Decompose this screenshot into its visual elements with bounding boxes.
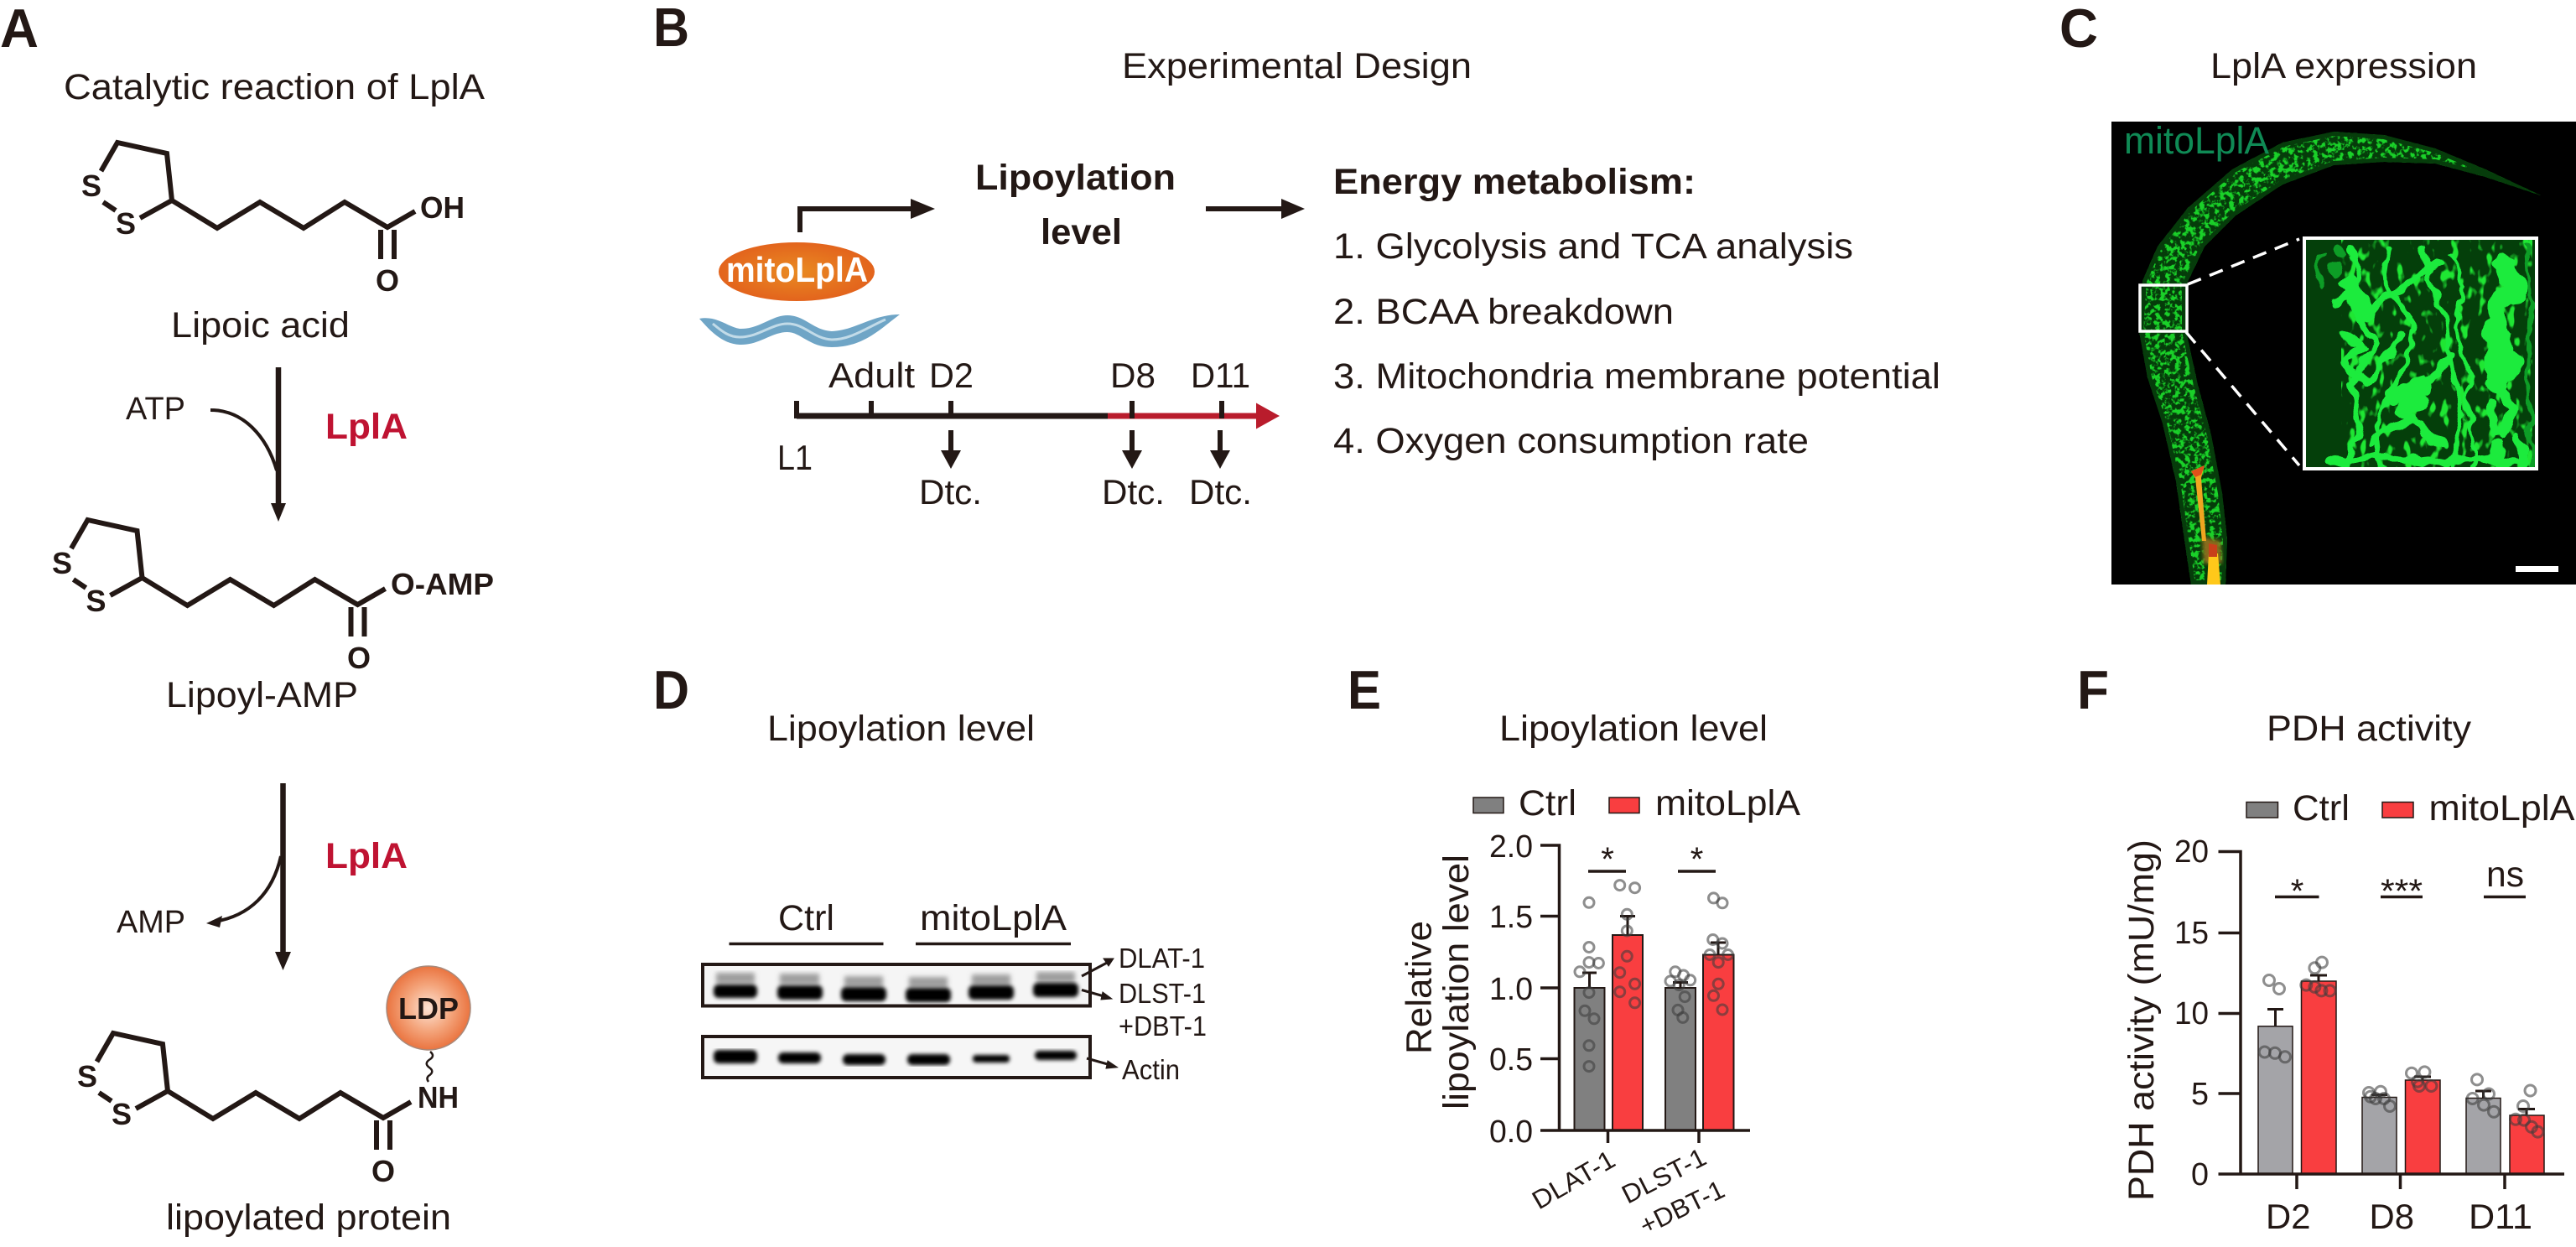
text: lipoylation level: level bbox=[1041, 212, 1122, 252]
heading: energy metabolism: Energy metabolism: bbox=[1333, 162, 1696, 202]
legend: mitoLplA bbox=[1655, 783, 1800, 824]
heading: catalytic reaction: Catalytic reaction of LplA bbox=[64, 67, 485, 107]
structure: lipoylated protein: NH bbox=[418, 1080, 459, 1115]
x-axis category labels: DLAT-1 bbox=[1527, 1145, 1620, 1215]
arrow: mitoLplA to lipoylation bbox=[800, 199, 935, 232]
band labels: DLAT-1 bbox=[1119, 943, 1205, 974]
icon: blue worm bbox=[699, 314, 900, 347]
panel letter D: D bbox=[653, 659, 689, 720]
y-axis tick labels bbox=[1489, 829, 1533, 1150]
panel letter F: F bbox=[2077, 659, 2109, 720]
legend: Ctrl bbox=[1519, 783, 1576, 824]
y-axis tick labels: 2.0 bbox=[1489, 829, 1533, 865]
oval: mitoLplA bbox=[719, 242, 875, 301]
bars bbox=[1575, 935, 1734, 1130]
arrow: lipoylation to energy metabolism bbox=[1206, 199, 1305, 219]
y-axis title: lipoylation level bbox=[1436, 855, 1477, 1109]
panel letter E: E bbox=[1348, 659, 1381, 720]
panel F: PDH activity bar chart bbox=[2077, 659, 2575, 1236]
zoom box bbox=[2140, 285, 2187, 331]
timepoint labels: D2 bbox=[929, 356, 974, 395]
label: lipoic acid: Lipoic acid bbox=[171, 305, 350, 346]
heading: PDH activity: PDH activity bbox=[2267, 709, 2472, 749]
enzyme label: LplA: LplA bbox=[325, 836, 408, 876]
legend bbox=[2246, 788, 2575, 829]
y-axis title bbox=[1399, 855, 1477, 1109]
blot: DLAT-1 and DLST-1 bands bbox=[703, 964, 1090, 1006]
list of analyses: 2. BCAA breakdown bbox=[1333, 292, 1674, 332]
group labels with brackets: Ctrl bbox=[778, 898, 834, 938]
label: lipoylated protein: lipoylated protein bbox=[166, 1198, 451, 1238]
x-axis category labels: D8 bbox=[2370, 1197, 2414, 1236]
x-axis category labels: +DBT-1 bbox=[1635, 1174, 1729, 1240]
detection labels: Dtc. bbox=[1102, 472, 1165, 512]
significance markers: * bbox=[1690, 841, 1703, 878]
oval: mitoLplA: mitoLplA bbox=[726, 250, 868, 289]
heading: lipoylation level: Lipoylation level bbox=[767, 709, 1035, 749]
timepoint labels: D8 bbox=[1110, 356, 1156, 395]
band labels: Actin bbox=[1122, 1054, 1180, 1085]
group labels with brackets bbox=[730, 898, 1071, 944]
heading: lipoylation level: Lipoylation level bbox=[1499, 709, 1768, 749]
band labels: DLST-1 bbox=[1119, 978, 1206, 1009]
axes bbox=[1540, 845, 1750, 1143]
label: AMP: AMP bbox=[117, 905, 185, 940]
label: mitoLplA: mitoLplA bbox=[2124, 119, 2269, 162]
structure: lipoylated protein: S bbox=[77, 1059, 97, 1094]
bars bbox=[2258, 981, 2544, 1174]
label: ATP: ATP bbox=[126, 392, 185, 427]
timepoint labels bbox=[777, 356, 1250, 477]
y-axis title: Relative bbox=[1399, 921, 1439, 1054]
y-axis tick labels: 5 bbox=[2191, 1077, 2209, 1112]
blot: actin bands bbox=[703, 1037, 1090, 1078]
structure: lipoic acid: S bbox=[81, 169, 101, 203]
panel D: western blot bbox=[653, 659, 1207, 1085]
significance markers: ns bbox=[2486, 855, 2524, 895]
inset: mitochondria close-up bbox=[2304, 238, 2537, 469]
structure: lipoylated protein: S bbox=[112, 1097, 132, 1131]
timepoint labels: D11 bbox=[1191, 356, 1250, 395]
fluorescence image bbox=[2111, 119, 2576, 585]
data points bbox=[2259, 957, 2543, 1137]
legend bbox=[1473, 783, 1800, 824]
y-axis tick labels: 1.5 bbox=[1489, 900, 1533, 935]
band labels: +DBT-1 bbox=[1119, 1011, 1207, 1042]
x-axis category labels: D11 bbox=[2469, 1197, 2532, 1236]
scale bar bbox=[2516, 566, 2558, 572]
structure: lipoic acid: O bbox=[376, 263, 399, 298]
protein bead: LDP bbox=[387, 966, 470, 1050]
timepoint labels: L1 bbox=[777, 438, 813, 477]
protein bead: LDP: LDP bbox=[398, 991, 459, 1026]
significance markers: *** bbox=[2381, 873, 2423, 910]
structure: lipoyl-AMP: S bbox=[52, 546, 72, 580]
heading: LplA expression: LplA expression bbox=[2210, 46, 2477, 86]
panel A: catalytic reaction of LplA bbox=[0, 0, 494, 1238]
x-axis category labels bbox=[1527, 1142, 1729, 1240]
list of analyses: 3. Mitochondria membrane potential bbox=[1333, 356, 1940, 397]
list of analyses bbox=[1333, 226, 1940, 461]
zoom dashed guide lines bbox=[2186, 239, 2299, 465]
group labels with brackets: mitoLplA bbox=[920, 898, 1067, 938]
y-axis tick labels: 0.5 bbox=[1489, 1042, 1533, 1078]
structure: lipoic acid: OH bbox=[420, 190, 465, 225]
panel B: experimental design bbox=[653, 0, 1940, 512]
y-axis title: PDH activity (mU/mg) bbox=[2122, 839, 2162, 1201]
x-axis category labels: D2 bbox=[2266, 1197, 2311, 1236]
enzyme label: LplA: LplA bbox=[325, 407, 408, 447]
text: lipoylation level bbox=[975, 158, 1176, 252]
timepoint labels: Adult bbox=[828, 356, 915, 395]
y-axis tick labels bbox=[2174, 834, 2209, 1192]
data points bbox=[1575, 881, 1733, 1072]
list of analyses: 4. Oxygen consumption rate bbox=[1333, 421, 1809, 461]
y-axis tick labels: 10 bbox=[2174, 996, 2209, 1031]
x-axis category labels bbox=[2266, 1197, 2532, 1236]
x-axis category labels: DLST-1 bbox=[1617, 1142, 1711, 1209]
structure: lipoylated protein: O bbox=[371, 1154, 395, 1188]
arrow: second reaction with AMP output bbox=[206, 783, 291, 970]
significance markers: * bbox=[1601, 841, 1614, 878]
arrow: first reaction with ATP input bbox=[210, 367, 286, 522]
detection labels: Dtc. bbox=[1189, 472, 1252, 512]
y-axis tick labels: 20 bbox=[2174, 834, 2209, 870]
structure: lipoyl-AMP bbox=[52, 520, 494, 675]
significance markers: * bbox=[2291, 873, 2303, 910]
band labels bbox=[1119, 943, 1207, 1085]
y-axis tick labels: 0.0 bbox=[1489, 1115, 1533, 1150]
significance markers bbox=[2275, 855, 2526, 910]
error bars bbox=[1582, 916, 1726, 988]
band arrows bbox=[1082, 959, 1117, 1068]
legend: Ctrl bbox=[2293, 788, 2350, 829]
structure: lipoyl-AMP: O bbox=[347, 641, 371, 675]
y-axis tick labels: 0 bbox=[2191, 1157, 2209, 1192]
structure: lipoyl-AMP: S bbox=[86, 584, 106, 618]
axes bbox=[2219, 852, 2564, 1189]
panel E: relative lipoylation bar chart bbox=[1348, 659, 1800, 1240]
y-axis tick labels: 15 bbox=[2174, 916, 2209, 951]
significance markers bbox=[1588, 841, 1716, 878]
panel C: LplA expression micrograph bbox=[2059, 0, 2576, 585]
structure: lipoylated protein bbox=[77, 1033, 459, 1188]
structure: lipoic acid bbox=[81, 143, 465, 298]
structure: lipoyl-AMP: O-AMP bbox=[391, 567, 494, 601]
worm body bbox=[2139, 132, 2541, 585]
legend: mitoLplA bbox=[2428, 788, 2575, 829]
structure: lipoic acid: S bbox=[116, 206, 136, 241]
heading: experimental design: Experimental Design bbox=[1122, 46, 1472, 86]
detection labels: Dtc. bbox=[919, 472, 982, 512]
detection arrows bbox=[941, 430, 1230, 469]
y-axis tick labels: 1.0 bbox=[1489, 972, 1533, 1007]
label: lipoyl-AMP: Lipoyl-AMP bbox=[166, 675, 358, 715]
text: lipoylation level: Lipoylation bbox=[975, 158, 1176, 198]
detection labels bbox=[919, 472, 1252, 512]
error bars bbox=[2267, 975, 2535, 1115]
list of analyses: 1. Glycolysis and TCA analysis bbox=[1333, 226, 1853, 267]
timeline arrow bbox=[797, 401, 1280, 429]
